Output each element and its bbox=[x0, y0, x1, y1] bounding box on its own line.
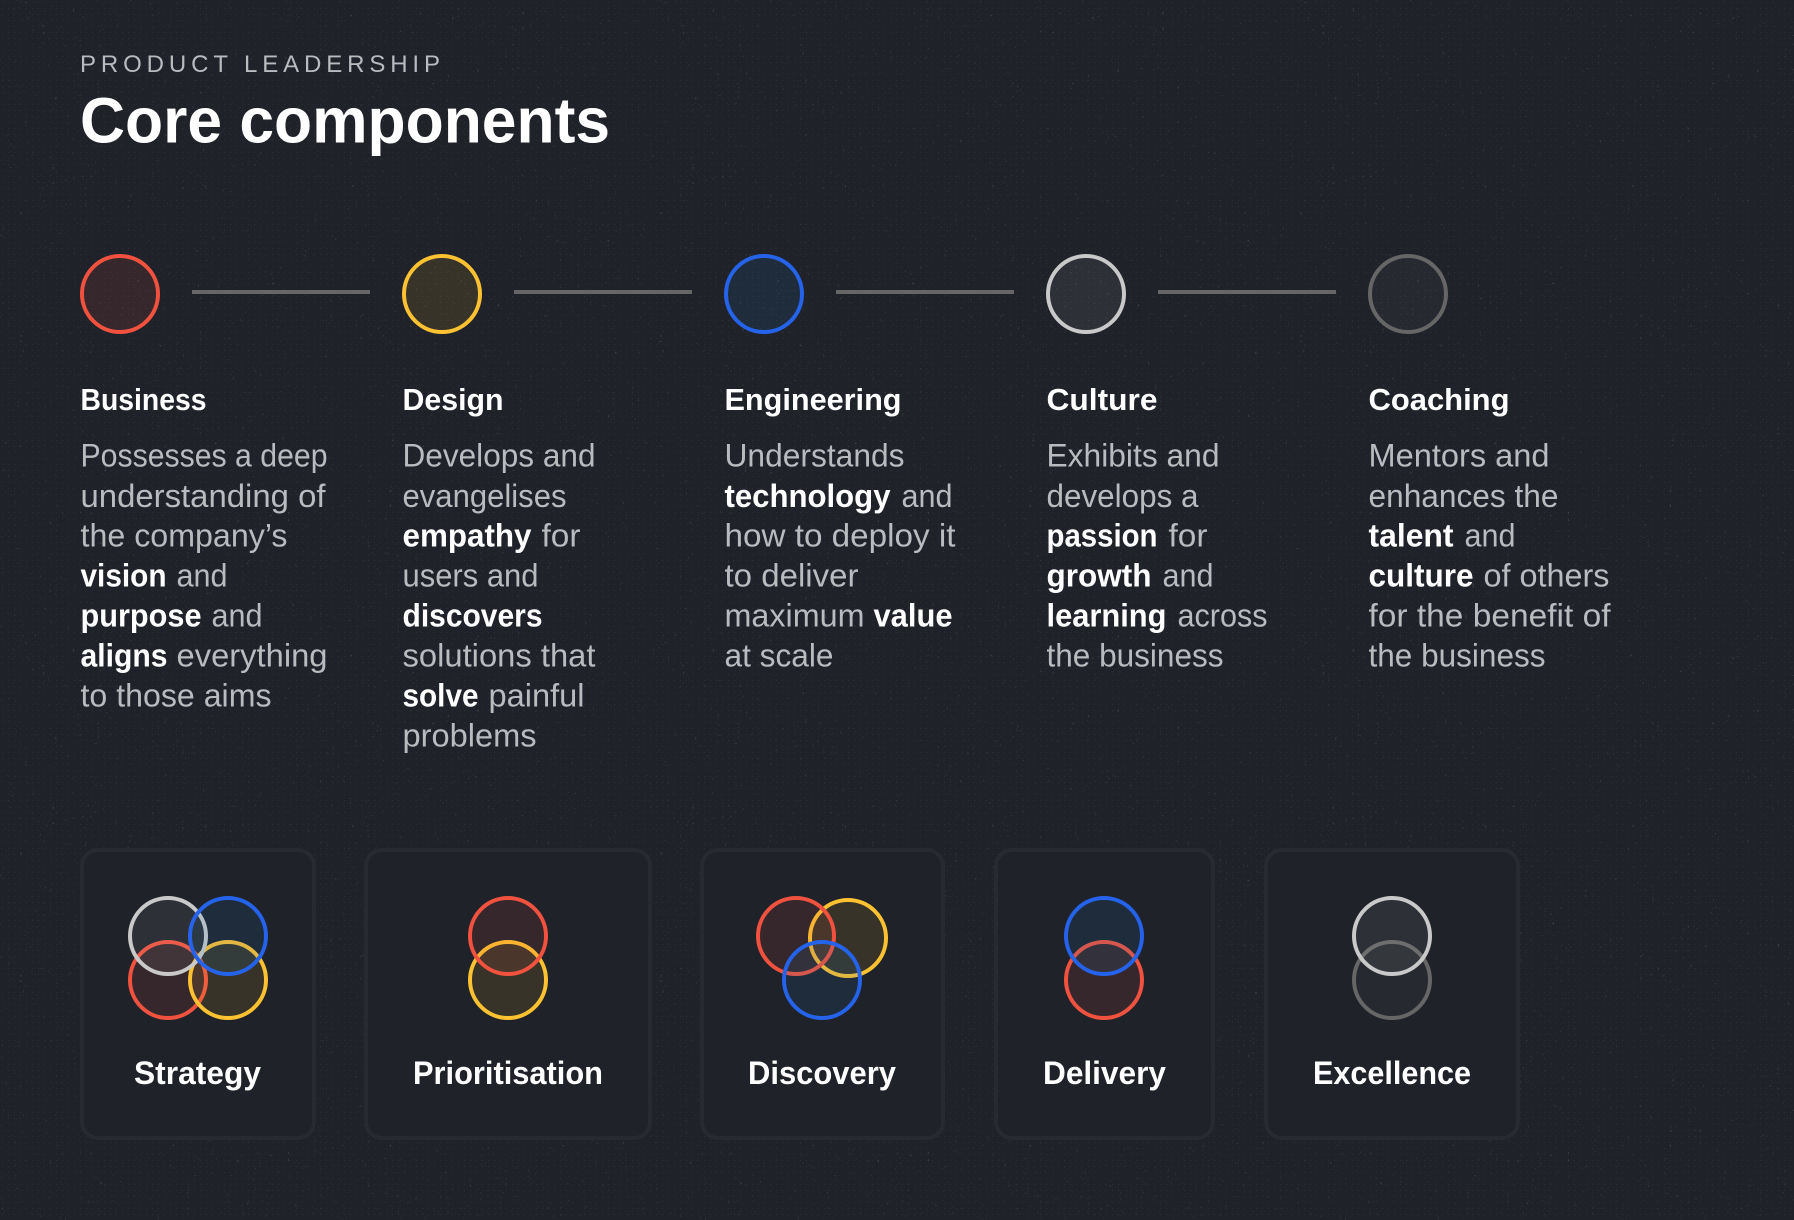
heading: Culture: Culture bbox=[1046, 382, 1158, 417]
text: Engineering description: maximum bbox=[724, 598, 864, 634]
text: Business description: and bbox=[212, 598, 262, 634]
panel: Culture bbox=[1046, 256, 1268, 674]
icon: two overlapping circles bbox=[470, 898, 546, 1018]
text: Coaching description: Mentors and bbox=[1368, 438, 1550, 474]
text: Culture description: Exhibits and bbox=[1046, 438, 1220, 474]
heading: Business: Business bbox=[80, 382, 206, 417]
text: Business description: the company’s bbox=[80, 518, 288, 554]
text: Engineering description: Understands bbox=[724, 438, 904, 474]
icon: yellow circle bbox=[404, 256, 480, 332]
text: Engineering description: how to deploy it bbox=[724, 518, 956, 554]
text: Design description: Develops and bbox=[402, 438, 596, 474]
text: Design description: evangelises bbox=[402, 478, 566, 514]
card: Prioritisation bbox=[366, 850, 650, 1138]
text: Coaching description: the business bbox=[1368, 638, 1546, 674]
connector: engineering to culture bbox=[836, 290, 1014, 294]
text: Design description: problems bbox=[402, 718, 536, 754]
text: Coaching description: talent bbox=[1368, 518, 1454, 554]
label: Discovery: Discovery bbox=[748, 1055, 896, 1091]
card: Discovery bbox=[702, 850, 943, 1138]
text: Engineering description: technology bbox=[724, 478, 891, 514]
text: Design description: users and bbox=[402, 558, 538, 594]
panel: Engineering bbox=[724, 256, 956, 674]
text: Coaching description bbox=[1368, 438, 1611, 674]
text: Coaching description: of others bbox=[1484, 558, 1610, 594]
heading: Design: Design bbox=[402, 382, 504, 417]
text: Business description: and bbox=[176, 558, 228, 594]
icon: dark grey circle bbox=[1370, 256, 1446, 332]
text: Culture description bbox=[1046, 438, 1268, 674]
heading: Engineering: Engineering bbox=[724, 382, 902, 417]
text: Coaching description: for the benefit of bbox=[1368, 598, 1611, 634]
label: Prioritisation: Prioritisation bbox=[413, 1055, 603, 1091]
text: Design description: solve bbox=[402, 678, 478, 714]
text: Business description: to those aims bbox=[80, 678, 272, 714]
title: Core components bbox=[80, 84, 610, 156]
text: Business description: everything bbox=[176, 638, 328, 674]
label: Delivery: Delivery bbox=[1043, 1055, 1166, 1091]
panel: Coaching bbox=[1368, 256, 1611, 674]
text: Engineering description bbox=[724, 438, 956, 674]
eyebrow: PRODUCT LEADERSHIP bbox=[80, 51, 440, 78]
text: Business description: aligns bbox=[80, 638, 168, 674]
text: Culture description: passion bbox=[1046, 518, 1158, 554]
text: Business description bbox=[80, 438, 328, 714]
text: Design description: painful bbox=[488, 678, 584, 714]
icon: two overlapping circles bbox=[1066, 898, 1142, 1018]
text: Culture description: the business bbox=[1046, 638, 1224, 674]
text: Coaching description: enhances the bbox=[1368, 478, 1558, 514]
text: Culture description: learning bbox=[1046, 598, 1166, 634]
connector: business to design bbox=[192, 290, 370, 294]
text: Business description: vision bbox=[80, 558, 166, 594]
text: Coaching description: culture bbox=[1368, 558, 1474, 594]
text: Culture description: across bbox=[1178, 598, 1268, 634]
heading: Coaching: Coaching bbox=[1368, 382, 1510, 417]
text: Culture description: develops a bbox=[1046, 478, 1199, 514]
icon: three overlapping circles bbox=[758, 898, 886, 1018]
card: Excellence bbox=[1266, 850, 1518, 1138]
panel: Business bbox=[80, 256, 328, 714]
text: Engineering description: to deliver bbox=[724, 558, 859, 594]
text: Culture description: and bbox=[1162, 558, 1214, 594]
panel: Design bbox=[402, 256, 596, 754]
connector: culture to coaching bbox=[1158, 290, 1336, 294]
text: Culture description: for bbox=[1168, 518, 1208, 554]
label: Strategy: Strategy bbox=[134, 1055, 261, 1091]
text: Engineering description: at scale bbox=[724, 638, 834, 674]
icon: blue circle bbox=[726, 256, 802, 332]
card: Strategy bbox=[82, 850, 314, 1138]
text: Engineering description: and bbox=[902, 478, 952, 514]
text: Business description: Possesses a deep bbox=[80, 438, 328, 474]
icon: red circle bbox=[82, 256, 158, 332]
text: Business description: understanding of bbox=[80, 478, 326, 514]
text: Design description: solutions that bbox=[402, 638, 596, 674]
label: Excellence: Excellence bbox=[1313, 1055, 1471, 1091]
text: Coaching description: and bbox=[1464, 518, 1516, 554]
text: Design description: empathy bbox=[402, 518, 532, 554]
card: Delivery bbox=[996, 850, 1213, 1138]
icon: two overlapping grey circles bbox=[1354, 898, 1430, 1018]
icon: four overlapping circles bbox=[130, 898, 266, 1018]
text: Engineering description: value bbox=[874, 598, 952, 634]
text: Design description: for bbox=[542, 518, 581, 554]
connector: design to engineering bbox=[514, 290, 692, 294]
text: Culture description: growth bbox=[1046, 558, 1152, 594]
icon: light grey circle bbox=[1048, 256, 1124, 332]
text: Design description: discovers bbox=[402, 598, 542, 634]
text: Business description: purpose bbox=[80, 598, 202, 634]
text: Design description bbox=[402, 438, 596, 754]
